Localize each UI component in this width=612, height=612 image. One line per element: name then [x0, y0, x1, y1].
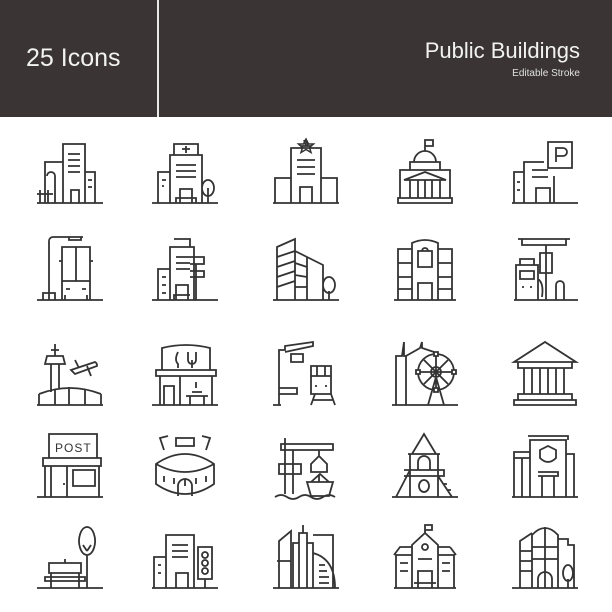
- icon: playground: [392, 434, 458, 497]
- icon: park bench: [37, 527, 103, 588]
- icon: shopping mall: [394, 240, 456, 300]
- icon: post office: POST: [55, 441, 92, 455]
- icon: airport: [37, 344, 103, 405]
- icon: ferris wheel: [392, 342, 458, 405]
- icon: hospital: [152, 144, 218, 203]
- icon: traffic light building: [152, 535, 218, 588]
- icon: office with signs: [152, 239, 218, 300]
- left title: 25 Icons: [26, 44, 121, 72]
- icon: bus stop: [37, 237, 103, 300]
- icon: parking: [512, 142, 578, 203]
- icon: modern building with tree: [512, 527, 578, 588]
- icon: port crane: [275, 438, 335, 499]
- icon: stadium: [156, 436, 214, 496]
- icon: hotel with star: [273, 139, 339, 203]
- icon: post office: [37, 434, 103, 497]
- icon: city skyline: [273, 525, 339, 588]
- icon: train station: [273, 342, 335, 405]
- icon: skyscrapers: [273, 239, 339, 300]
- icon: office with lamp: [37, 144, 103, 203]
- vertical divider: [157, 0, 159, 117]
- icon: police station: [512, 436, 578, 497]
- icon: capitol: [398, 140, 452, 203]
- right title: Public Buildings: [425, 38, 580, 63]
- icon: school: [394, 525, 456, 588]
- subtitle: Editable Stroke: [512, 68, 580, 79]
- icon: restaurant: [152, 345, 218, 405]
- icon: bank: [514, 342, 576, 405]
- header band: [0, 0, 612, 117]
- icon: gas station: [514, 239, 578, 300]
